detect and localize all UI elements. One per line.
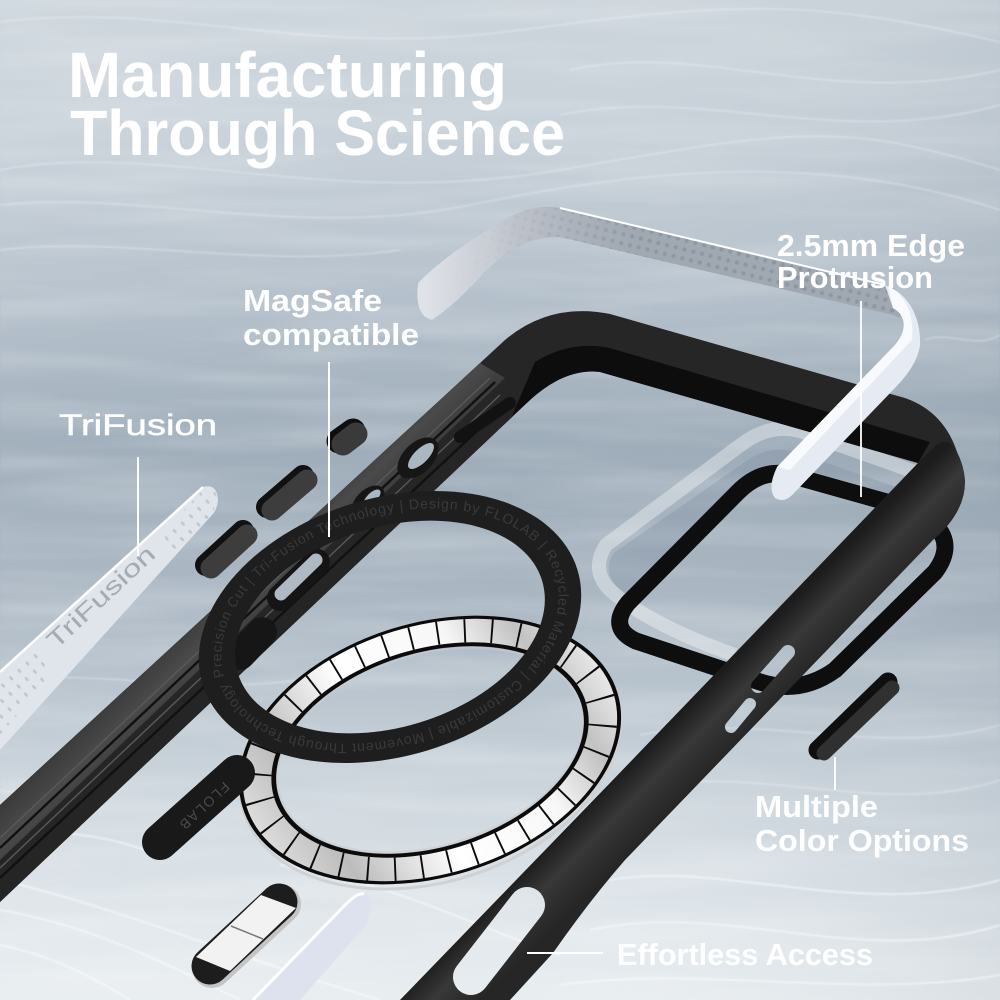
white bumper insert: top [417, 207, 920, 500]
label: multiple color options: Multiple [755, 789, 878, 824]
black pull tab with FLOLAB mark [160, 773, 237, 842]
title: Through Science [70, 97, 565, 169]
black magnetic ring with engraved text: Precision Cut | Tri-Fusion Technology | Design by FLOLAB | Recycled Material | Customizable | Movement Through Technology | [212, 498, 569, 754]
black magnetic ring with engraved text [198, 491, 582, 763]
side oval hole [390, 430, 446, 486]
silver capsule part [196, 895, 296, 971]
silver magnet ring [239, 616, 622, 890]
white bumper insert: left, with TriFusion marking: TriFusion [42, 541, 161, 654]
side recess [240, 632, 262, 655]
side recess slit [460, 403, 510, 437]
button lower [206, 531, 247, 568]
side buttons [206, 431, 356, 568]
label: edge protrusion: 2.5mm Edge [777, 228, 965, 263]
leader: color options [834, 757, 836, 790]
translucent clear inner shell [599, 429, 915, 655]
button top [339, 431, 356, 444]
side capsule hole [280, 560, 317, 598]
title: Manufacturing [68, 39, 507, 111]
case frame: right rail [400, 442, 965, 1000]
label: effortless access: Effortless Access [617, 937, 873, 972]
leader: TriFusion [137, 457, 139, 556]
leader: MagSafe [328, 362, 330, 537]
label: edge protrusion: Protrusion [777, 260, 933, 295]
label: MagSafe compatible: MagSafe [243, 283, 382, 318]
black inner frame ring [620, 473, 945, 686]
leader: edge protrusion [860, 301, 862, 497]
case frame: top and left rails [0, 311, 958, 902]
side small hole [345, 479, 391, 525]
color option side button [818, 682, 892, 753]
button middle [267, 476, 307, 510]
white bumper insert: left, with TriFusion marking [0, 486, 218, 750]
label: MagSafe compatible: compatible [243, 317, 419, 352]
white bumper insert: bottom [253, 894, 370, 1000]
TriFusion logo: TriFusion [59, 409, 217, 442]
label: multiple color options: Color Options [755, 823, 969, 858]
black pull tab with FLOLAB mark: FLOLAB [177, 779, 233, 833]
leader: effortless access [527, 952, 603, 954]
